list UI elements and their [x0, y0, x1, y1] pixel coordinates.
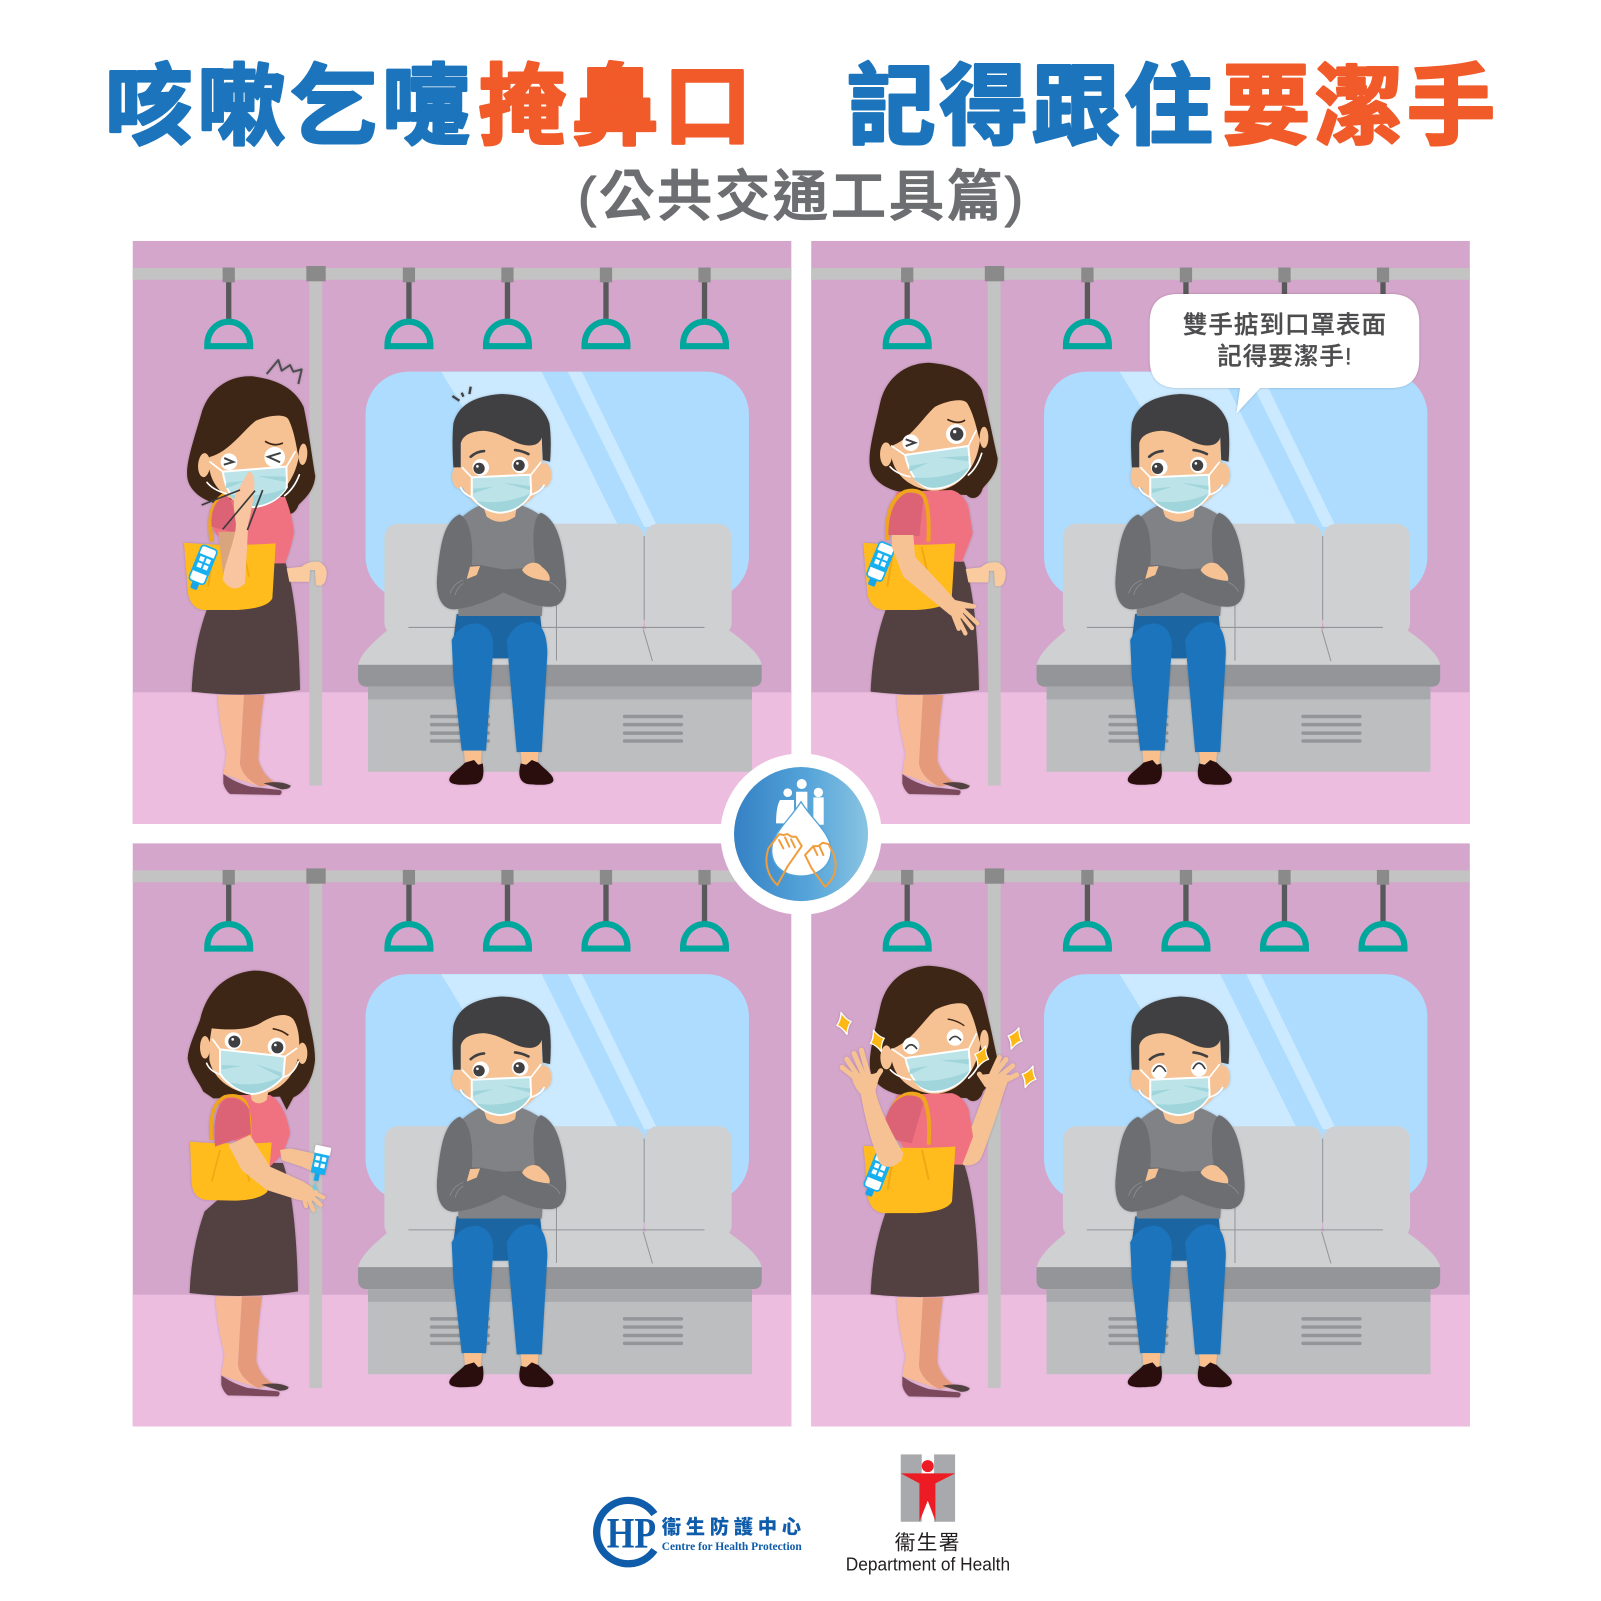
speech bubble text: 記得要潔手!	[1217, 343, 1353, 371]
icon: centre hand-washing badge	[720, 753, 882, 915]
panel 4: woman with clean hands and sparkles	[811, 843, 1470, 1426]
logo: Centre for Health Protection: HP	[607, 1510, 656, 1558]
speech bubble	[1150, 294, 1419, 414]
title: 掩鼻口	[479, 58, 756, 156]
man, startled	[437, 387, 566, 785]
title: 咳嗽乞嚏	[105, 58, 475, 156]
woman walking past with hand on skirt	[863, 363, 1006, 795]
logo: Centre for Health Protection: 衞生防護中心	[662, 1516, 806, 1539]
logo: Department of Health: Department of Health	[846, 1555, 1010, 1575]
logo: Department of Health	[846, 1454, 1010, 1575]
woman, hands raised	[834, 966, 1040, 1397]
title	[105, 58, 1499, 156]
logo: Centre for Health Protection: Centre for Health Protection	[662, 1539, 802, 1553]
logo: Centre for Health Protection	[597, 1500, 806, 1564]
title: 要潔手	[1222, 58, 1499, 156]
man	[437, 996, 566, 1387]
panel 2: woman touches mask, speech bubble	[811, 241, 1470, 824]
man	[1115, 394, 1245, 785]
panel 3: woman applies hand sanitiser	[133, 843, 791, 1426]
man, happy	[1115, 996, 1245, 1387]
woman with sanitiser	[188, 971, 331, 1396]
logo: Department of Health: 衞生署	[895, 1531, 961, 1554]
woman coughing	[184, 360, 327, 795]
title: 記得跟住	[847, 58, 1217, 156]
speech bubble text	[1183, 311, 1387, 371]
subtitle: (公共交通工具篇)	[578, 165, 1025, 227]
speech bubble text: 雙手掂到口罩表面	[1183, 311, 1387, 339]
panel 1: woman coughs into her hand	[133, 241, 791, 824]
